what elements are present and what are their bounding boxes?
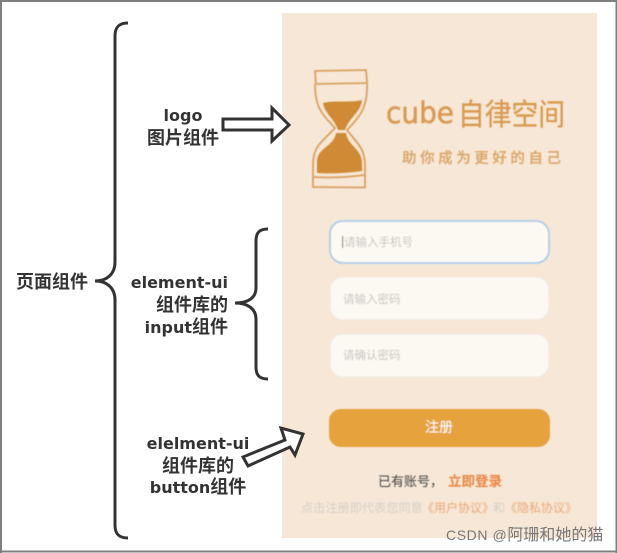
input: password — [330, 277, 549, 320]
label: input component: element-ui — [131, 273, 228, 292]
button: register: 注册 — [425, 417, 453, 437]
logo: 自律空间 — [458, 90, 565, 134]
label: input component: 组件库的 — [156, 291, 228, 317]
logo slogan: 助你成为更好的自己 — [402, 147, 561, 168]
login prompt: 立即登录 — [448, 470, 502, 490]
agreement line: 《用户协议》 — [422, 499, 494, 516]
label: logo image component: logo — [164, 106, 202, 125]
input: phone — [330, 221, 549, 263]
label: input component — [131, 273, 228, 339]
agreement line: 点击注册即代表您同意 — [301, 498, 423, 516]
arrow: to logo — [223, 108, 289, 141]
watermark: CSDN @阿珊和她的猫 — [446, 526, 603, 544]
input: confirm password: 请确认密码 — [343, 347, 400, 363]
login prompt: 已有账号， — [378, 471, 443, 490]
arrow: to button — [243, 428, 303, 466]
agreement line — [301, 498, 577, 516]
label: page components: 页面组件 — [16, 268, 88, 294]
button: register — [329, 409, 550, 447]
label: button component — [147, 434, 249, 499]
panel: registration page — [282, 13, 597, 538]
label: button component: elelment-ui — [147, 434, 249, 453]
logo — [313, 70, 565, 188]
label: input component: input组件 — [145, 313, 228, 339]
agreement line: 和 — [493, 499, 505, 516]
agreement line: 《隐私协议》 — [505, 499, 577, 516]
label: logo image component — [147, 106, 219, 150]
input: confirm password — [330, 334, 549, 377]
login prompt — [378, 470, 502, 490]
label: button component: button组件 — [150, 473, 246, 499]
input: password: 请输入密码 — [343, 291, 400, 307]
brace: page components — [95, 23, 128, 538]
label: button component: 组件库的 — [162, 452, 234, 478]
input: phone: 请输入手机号 — [344, 234, 413, 250]
icon: hourglass — [313, 70, 367, 188]
logo wordmark: cube — [386, 96, 454, 130]
brace: input components — [235, 229, 268, 379]
label: logo image component: 图片组件 — [147, 124, 219, 150]
